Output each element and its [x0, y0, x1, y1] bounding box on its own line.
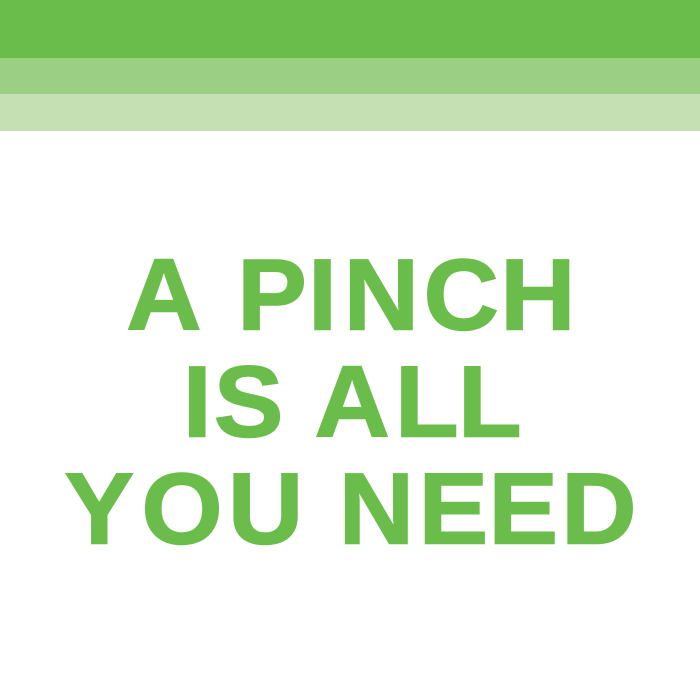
title [64, 238, 637, 565]
band: dark green [0, 0, 700, 58]
band: light green [0, 94, 700, 131]
title line 1: A PINCH [126, 238, 576, 351]
title line 2: IS ALL [183, 345, 522, 458]
header: three green bands [0, 0, 700, 131]
title line 3: YOU NEED [64, 452, 637, 565]
band: medium green [0, 58, 700, 94]
